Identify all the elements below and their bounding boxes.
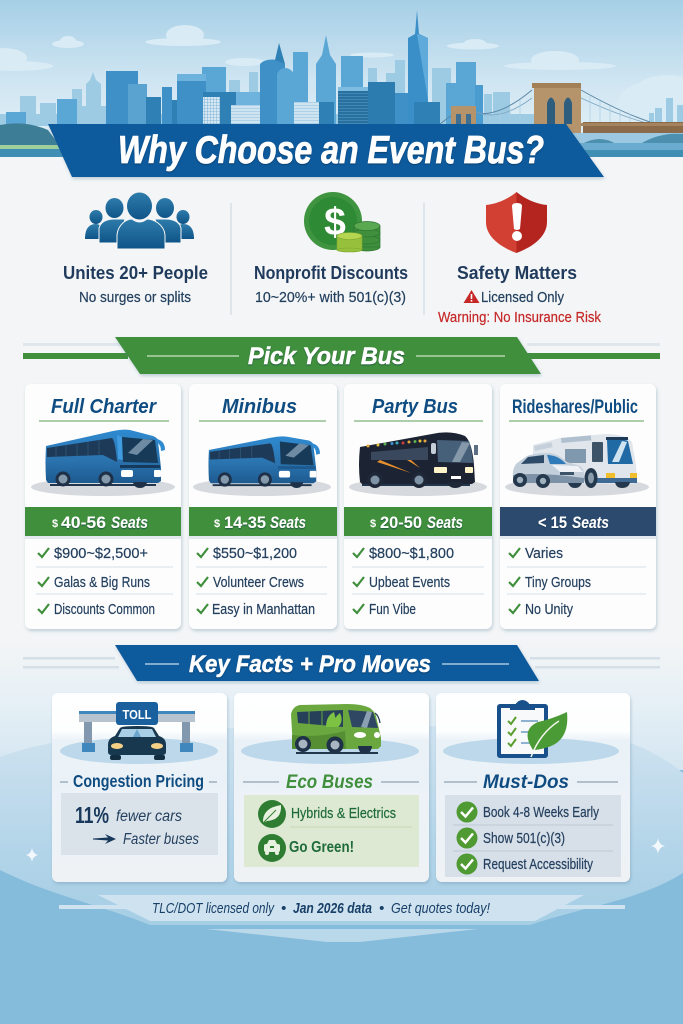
fact box: fewer cars (116, 808, 182, 825)
heading: Congestion Pricing (73, 771, 204, 791)
icon: leaf (258, 800, 286, 828)
panel: congestion pricing (52, 693, 227, 882)
panel: full charter (25, 384, 181, 629)
fact box: 11% (75, 802, 109, 828)
feature list: Galas & Big Runs (54, 575, 150, 591)
feature list: Varies (525, 546, 563, 562)
seats band: Seats (427, 513, 463, 532)
heading: Pick Your Bus (248, 343, 405, 370)
checklist (445, 795, 621, 877)
panel: must-dos (436, 693, 630, 882)
icon: green eco bus (241, 704, 419, 764)
seats band: $ (370, 518, 376, 530)
divider (423, 203, 425, 315)
panel: party bus (344, 384, 492, 629)
card title: Minibus (222, 396, 297, 418)
feature list: $550~$1,200 (213, 546, 297, 562)
checklist: Show 501(c)(3) (483, 831, 565, 847)
feature list: $800~$1,800 (369, 546, 454, 562)
footer text: • (281, 900, 286, 917)
seats band: $ (214, 518, 220, 530)
car (513, 453, 584, 488)
transit bus (533, 434, 637, 488)
heading: Must-Dos (483, 772, 569, 793)
benefit: nonprofit discounts (254, 192, 408, 306)
subtext: 10~20%+ with 501(c)(3) (255, 289, 406, 306)
feature list (352, 546, 484, 618)
header skyline scene (0, 0, 683, 157)
footer text: Jan 2026 data (293, 900, 372, 917)
icon: dollar coin and stacks: $ (324, 201, 346, 244)
icon: toll booth and car: TOLL (122, 707, 152, 722)
seats band: Seats (111, 513, 148, 532)
feature list: Volunteer Crews (213, 575, 304, 591)
seats band: Seats (270, 513, 306, 532)
benefit: unites people (63, 192, 208, 306)
benefit: safety matters (438, 192, 601, 326)
section banner: key facts and pro moves (23, 645, 660, 681)
title: Why Choose an Event Bus? (118, 129, 544, 172)
title banner (48, 124, 604, 177)
arrow (93, 834, 116, 844)
card title: Rideshares/Public (512, 397, 638, 418)
licensed only: Licensed Only (481, 289, 564, 306)
eco feature box: Go Green! (289, 839, 354, 856)
icon: car and transit bus (505, 434, 649, 496)
icon: blue minibus (193, 436, 331, 496)
footer text (152, 900, 491, 917)
icon: red shield (486, 192, 547, 253)
icon: sparkle left (26, 848, 38, 862)
icon: warning triangle (464, 290, 480, 303)
seats band: 20-50 (380, 513, 422, 532)
card title: Party Bus (372, 396, 458, 418)
feature list: $900~$2,500+ (54, 546, 148, 562)
feature list: Fun Vibe (369, 602, 416, 618)
footer text: TLC/DOT licensed only (152, 900, 275, 917)
icon: blue coach bus (31, 430, 175, 496)
subtext: No surges or splits (79, 289, 191, 306)
heading: Key Facts + Pro Moves (189, 651, 431, 678)
heading: Safety Matters (457, 262, 577, 283)
footer text: Get quotes today! (391, 900, 491, 917)
panel: eco buses (234, 693, 429, 882)
heading: Unites 20+ People (63, 262, 208, 283)
mid buildings (6, 35, 483, 126)
fact box: Faster buses (123, 831, 199, 848)
seats band: $ (52, 518, 58, 530)
seats band: 40-56 (61, 513, 106, 532)
icon: group of people (85, 192, 194, 249)
feature list (507, 546, 646, 618)
feature list: Easy in Manhattan (212, 602, 315, 618)
seats band (344, 507, 492, 539)
feature list: Discounts Common (54, 602, 155, 618)
icon: green car (258, 834, 286, 862)
feature list (36, 546, 173, 618)
seats band (500, 507, 656, 539)
footer text: • (379, 900, 384, 917)
icon: toll booth and car (60, 702, 218, 764)
icon: dollar coin and stacks (304, 192, 380, 252)
seats band: < 15 (538, 513, 567, 532)
feature list: Tiny Groups (525, 575, 591, 591)
feature list (196, 546, 327, 618)
section banner: pick your bus (23, 337, 660, 374)
eco feature box: Hybrids & Electrics (291, 806, 396, 822)
feature list: No Unity (525, 602, 574, 618)
Brooklyn bridge (440, 83, 683, 135)
panel: minibus (189, 384, 337, 629)
icon: black party bus (349, 432, 487, 496)
heading: Nonprofit Discounts (254, 262, 408, 283)
checklist: Request Accessibility (483, 857, 594, 873)
panel: rideshares and public (500, 384, 656, 629)
shoreline and water (0, 123, 683, 157)
fact box (61, 793, 218, 855)
heading: Eco Buses (286, 772, 373, 793)
icon: sparkle right (651, 838, 665, 854)
warning text: Warning: No Insurance Risk (438, 309, 601, 326)
footer ribbon (59, 895, 625, 942)
checklist: Book 4-8 Weeks Early (483, 805, 600, 821)
divider (230, 203, 232, 315)
feature list: Upbeat Events (369, 575, 450, 591)
front buildings (106, 10, 440, 125)
far buildings (0, 60, 683, 126)
seats band: 14-35 (224, 513, 266, 532)
seats band (189, 507, 337, 539)
seats band (25, 507, 181, 539)
clouds (0, 25, 683, 124)
eco feature box (244, 795, 419, 867)
seats band: Seats (572, 513, 609, 532)
card title: Full Charter (51, 396, 157, 418)
icon: clipboard and leaf (443, 700, 619, 764)
